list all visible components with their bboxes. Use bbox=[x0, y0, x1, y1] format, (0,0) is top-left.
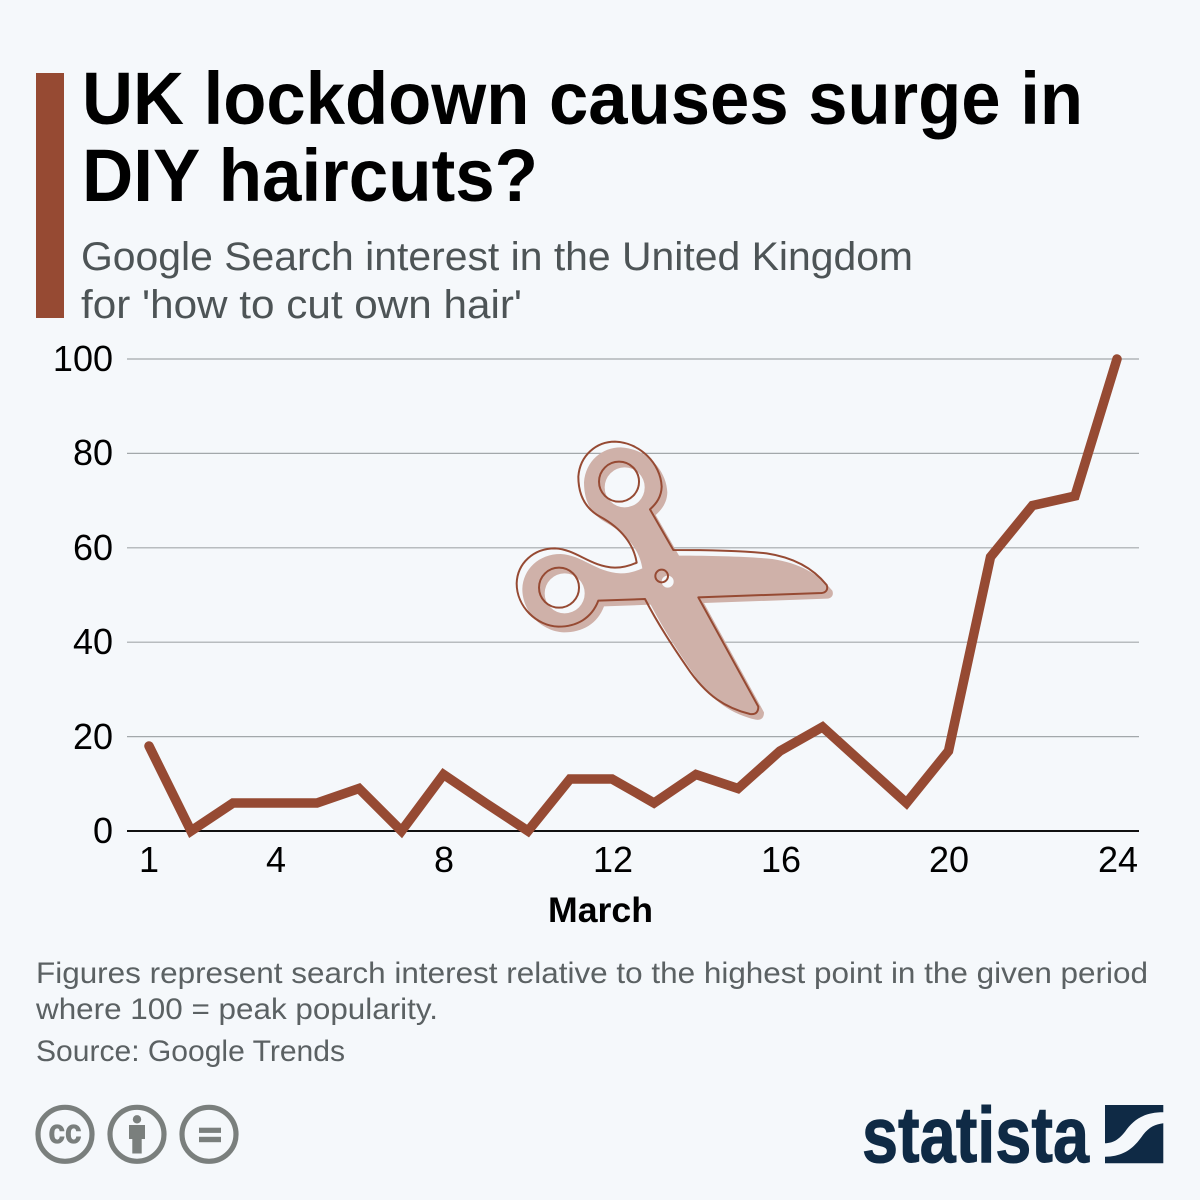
y axis labels: 100 bbox=[53, 338, 113, 379]
y axis labels: 20 bbox=[73, 716, 113, 757]
x axis labels bbox=[139, 839, 1138, 880]
scissors outline bbox=[517, 442, 827, 714]
grid lines bbox=[127, 359, 1139, 737]
title: UK lockdown causes surge in bbox=[82, 57, 1083, 140]
icon: attribution bbox=[110, 1107, 164, 1161]
y axis labels: 80 bbox=[73, 432, 113, 473]
x axis labels: 12 bbox=[593, 839, 633, 880]
x axis labels: 8 bbox=[434, 839, 454, 880]
footnote: where 100 = peak popularity. bbox=[35, 993, 438, 1026]
statista logo: statista bbox=[862, 1090, 1090, 1179]
icon: scissors bbox=[517, 442, 833, 720]
icon: creative commons bbox=[38, 1107, 92, 1161]
logo mark bbox=[1105, 1105, 1163, 1163]
x axis baseline bbox=[127, 830, 1139, 832]
x axis title: March bbox=[548, 891, 653, 930]
icon: creative commons: cc bbox=[48, 1113, 82, 1151]
footnote: Figures represent search interest relative to the highest point in the given period bbox=[36, 957, 1148, 990]
source: Source: Google Trends bbox=[36, 1035, 345, 1068]
accent bar bbox=[36, 73, 64, 318]
x axis labels: 1 bbox=[139, 839, 159, 880]
title bbox=[82, 57, 1083, 217]
y axis labels: 60 bbox=[73, 527, 113, 568]
y axis labels bbox=[53, 338, 113, 851]
subtitle bbox=[81, 235, 913, 327]
line chart: search interest bbox=[149, 359, 1117, 831]
x axis labels: 20 bbox=[929, 839, 969, 880]
subtitle: for 'how to cut own hair' bbox=[81, 283, 522, 327]
y axis labels: 0 bbox=[93, 810, 113, 851]
scissors shadow fill bbox=[522, 447, 833, 720]
footnote bbox=[35, 957, 1148, 1026]
icon: no derivatives bbox=[182, 1107, 236, 1161]
x axis labels: 16 bbox=[761, 839, 801, 880]
y axis labels: 40 bbox=[73, 621, 113, 662]
x axis labels: 24 bbox=[1098, 839, 1138, 880]
x axis labels: 4 bbox=[266, 839, 286, 880]
title: DIY haircuts? bbox=[82, 134, 538, 217]
subtitle: Google Search interest in the United Kingdom bbox=[81, 235, 913, 279]
